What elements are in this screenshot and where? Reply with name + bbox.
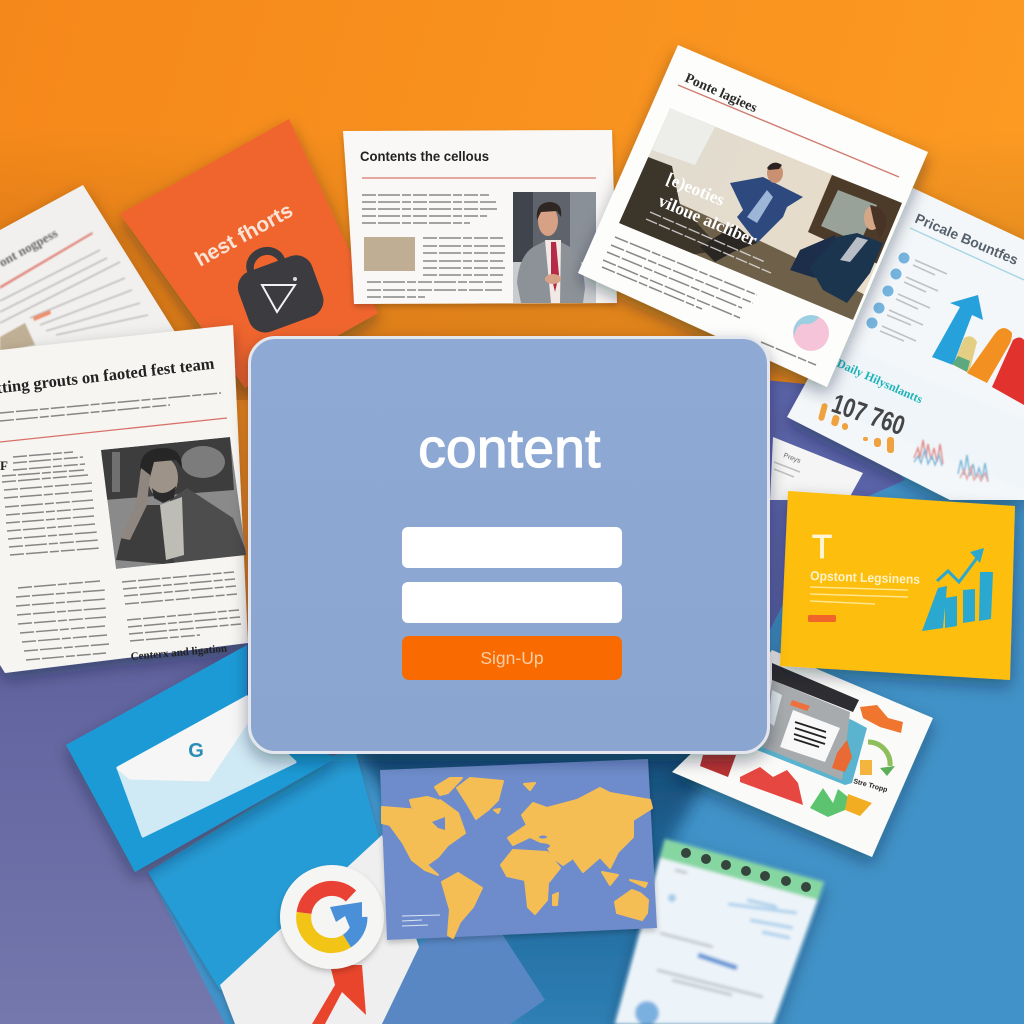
icon list — [866, 252, 947, 341]
background: purple patch right of panel — [765, 380, 905, 640]
article text right column — [122, 572, 241, 641]
envelope: lower blue sheet — [148, 750, 420, 1024]
envelope: blue card with flap — [66, 645, 338, 872]
document: article page with portrait — [0, 325, 248, 673]
chart: arrow and bars — [932, 295, 1024, 405]
button: sign up — [402, 636, 622, 680]
document: small page behind yellow card — [770, 437, 863, 500]
yellow card lines — [810, 587, 908, 604]
small page text: Preys — [782, 452, 802, 465]
photo: meeting scene — [619, 108, 903, 320]
heading: article: tting grouts on faoted fest team — [0, 354, 216, 397]
article photo: portrait — [101, 437, 248, 569]
head — [149, 460, 178, 494]
button label: Sign-Up — [480, 648, 544, 668]
map caption — [402, 915, 440, 926]
photo overlay subtitle: viloue alcliber — [655, 190, 761, 250]
mini line charts — [914, 440, 988, 482]
gauge — [860, 742, 895, 776]
page lines — [794, 722, 826, 747]
card: orange-red cover — [120, 119, 378, 388]
orange blob — [860, 705, 903, 733]
heading: photo page: Ponte lagiees — [682, 71, 760, 116]
sheet: darker blue — [382, 900, 545, 1024]
background: orange top — [0, 0, 1024, 700]
jacket — [170, 488, 248, 566]
panel title: content — [418, 417, 601, 479]
background: purple lower left — [0, 640, 340, 1024]
card heading: hest fhorts — [191, 199, 297, 271]
big number: 107 760 — [828, 388, 909, 441]
cabinet door — [808, 175, 903, 265]
card: yellow cover — [780, 491, 1015, 680]
map land — [382, 778, 652, 938]
gauge caption: Stre Tropp — [852, 778, 888, 794]
main signup panel — [250, 338, 768, 752]
window — [762, 680, 850, 780]
document: center page — [343, 130, 617, 304]
ribbon: red — [312, 965, 366, 1024]
icon: Google G — [304, 888, 362, 946]
green chart — [810, 788, 848, 817]
article caption: Centerx and ligation — [130, 643, 227, 663]
heading: center page: Contents the cellous — [360, 149, 489, 164]
icon: pastel orb — [793, 315, 829, 351]
calendar page (blurred) — [615, 839, 824, 1024]
red mountain chart — [740, 767, 803, 805]
photo overlay title: [e)eoties — [664, 168, 728, 210]
yellow card heading: Opstont Legsinens — [810, 568, 920, 587]
orange chart segment — [845, 794, 872, 816]
person seated right — [790, 235, 836, 278]
yellow card button — [808, 615, 836, 622]
couch — [619, 157, 712, 254]
background: blue lower right — [0, 440, 1024, 1024]
label: teal heading: Daily Hilysnlantts — [835, 356, 925, 406]
dark toolbar — [772, 663, 859, 712]
article text left column — [2, 452, 109, 660]
input: second field — [402, 582, 622, 623]
big letter: T — [812, 528, 832, 565]
red box — [700, 755, 736, 777]
image placeholder — [364, 237, 415, 271]
small caption — [761, 342, 816, 365]
drop cap: F — [0, 458, 8, 473]
floor — [619, 195, 865, 320]
document: tilted left page — [0, 185, 175, 360]
window frame — [757, 690, 867, 785]
background: dark blue under panel — [350, 745, 725, 1024]
envelope letter — [118, 697, 295, 836]
orange tag — [790, 700, 810, 711]
envelope flap — [118, 697, 247, 780]
orange mini bars — [818, 403, 894, 453]
person seated left — [700, 225, 757, 262]
chart: growth bars — [922, 548, 993, 631]
document: right infographic page — [787, 188, 1024, 500]
photo: man in suit — [513, 192, 596, 303]
icon: padlock bag — [227, 234, 328, 337]
document: chart collage page — [672, 650, 933, 857]
document: page with photo of two people — [578, 45, 928, 387]
input: first field — [402, 527, 622, 568]
map lakes and seas — [432, 817, 550, 849]
badge: Google circle — [280, 865, 384, 969]
world map card — [380, 759, 657, 940]
shirt — [160, 497, 184, 560]
raised arm — [120, 468, 150, 540]
white page in window — [780, 710, 840, 762]
heading: right page: Pricale Bountfes — [913, 210, 1021, 268]
icon: G letter: G — [188, 740, 204, 762]
calendar rings — [681, 848, 811, 892]
orange accent — [832, 740, 852, 772]
background: orange shading — [0, 130, 1024, 400]
